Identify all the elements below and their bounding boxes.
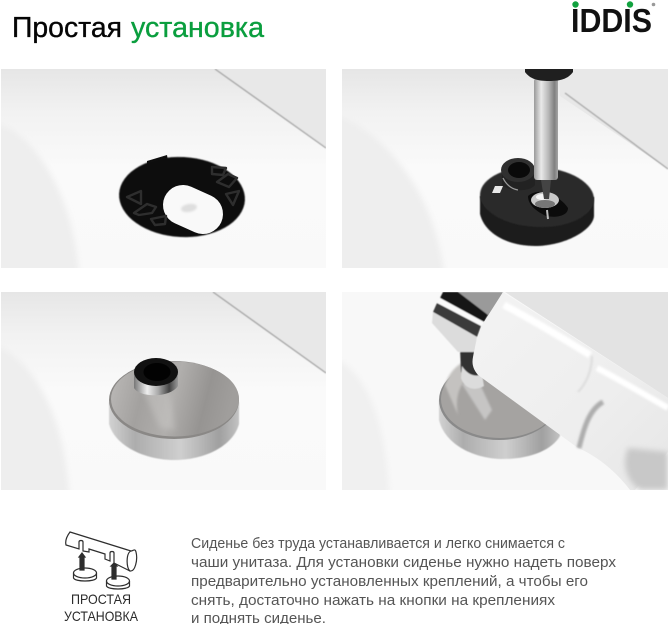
icon: seat hinge rod xyxy=(66,532,137,571)
panel: photo 2, screwdriver and black base xyxy=(342,69,668,268)
icon: easy installation diagram xyxy=(66,532,137,589)
collar xyxy=(134,358,178,395)
title: установка xyxy=(131,12,265,44)
description text: предварительно установленных креплений, а чтобы его xyxy=(191,573,588,590)
seat lid xyxy=(473,292,668,490)
title xyxy=(12,12,265,44)
icon label: УСТАНОВКА xyxy=(64,608,139,624)
description text: снять, достаточно нажать на кнопки на креплениях xyxy=(191,592,556,609)
collar xyxy=(501,158,535,190)
panel: photo 4, seat hinge on steel base xyxy=(342,292,668,490)
panel: photo 1, black mounting plate xyxy=(1,69,326,268)
description text: чаши унитаза. Для установки сиденье нужно надеть поверх xyxy=(191,554,616,571)
logo: IDDIS: IDDIS xyxy=(571,2,652,39)
screw xyxy=(531,192,559,219)
icon label xyxy=(64,591,139,624)
title: Простая xyxy=(12,12,122,44)
black plate xyxy=(117,154,247,240)
icon: left screw and base xyxy=(74,553,96,581)
icon label: ПРОСТАЯ xyxy=(71,591,131,607)
screwdriver xyxy=(525,69,573,199)
icon: rod end xyxy=(127,551,131,571)
description text: Сиденье без труда устанавливается и легко снимается с xyxy=(191,535,565,552)
panel: photo 3, steel cover xyxy=(0,292,326,510)
steel base xyxy=(439,360,560,459)
description text xyxy=(191,535,616,624)
black base xyxy=(479,164,595,246)
chrome stem xyxy=(432,292,503,389)
icon: right screw and base xyxy=(106,563,130,589)
steel disc xyxy=(109,361,239,460)
